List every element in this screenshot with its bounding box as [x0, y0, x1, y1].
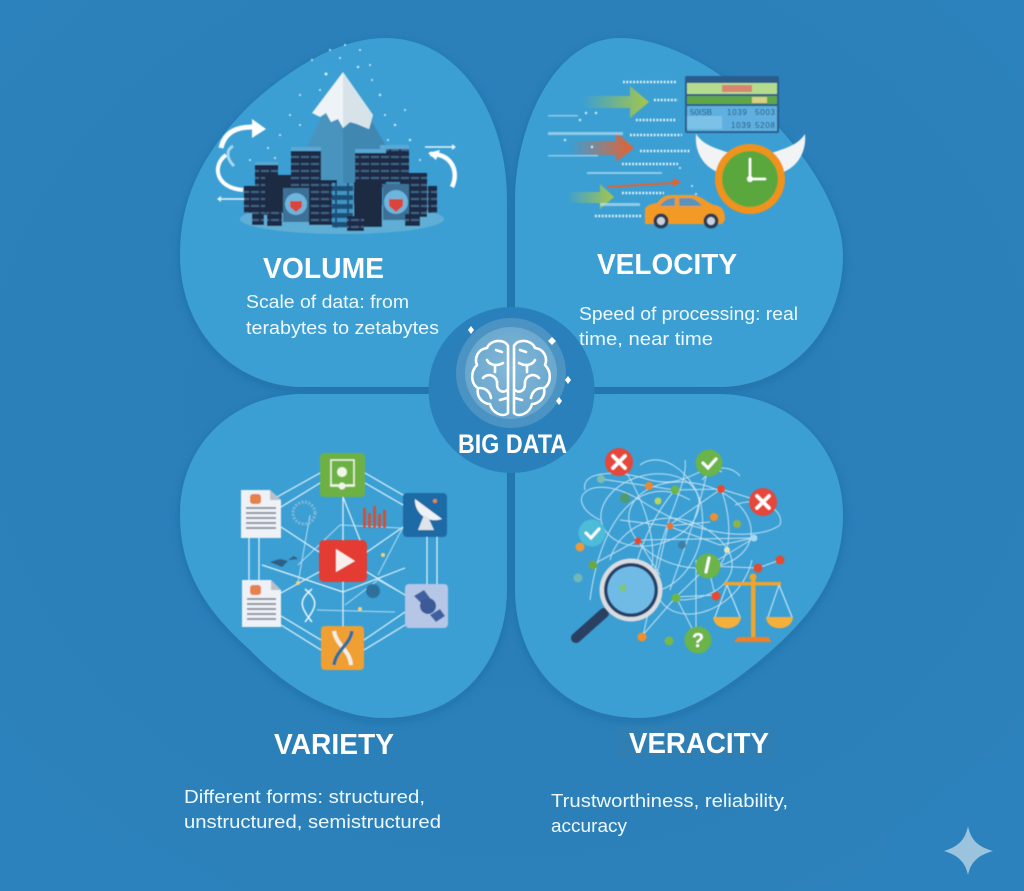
text: veracity description: Trustworthiness, reliability, [551, 790, 788, 811]
heading: variety: VARIETY [274, 729, 394, 761]
scale [713, 574, 793, 642]
icon: document bottom [242, 580, 281, 627]
badge: exclamation [696, 554, 720, 578]
center hub: big data [428, 307, 594, 473]
badge: red x right [749, 488, 777, 516]
heading: big data: BIG DATA [458, 429, 567, 459]
icon: truth network [574, 448, 793, 654]
icon: speed arrows, dashboard, clock and car [548, 76, 805, 228]
text: veracity description [551, 790, 788, 836]
badge: question: ? [692, 630, 704, 652]
panel: veracity [515, 394, 843, 836]
heading: volume: VOLUME [263, 253, 384, 285]
panel: velocity [515, 38, 843, 387]
tangled lines [581, 460, 781, 640]
text: velocity description: Speed of processing: real [579, 303, 798, 324]
heading: velocity: VELOCITY [597, 249, 737, 281]
icon: document top [241, 490, 281, 538]
dashboard: 1039 [731, 121, 752, 130]
badge: question [684, 626, 712, 654]
icon: sparkle watermark [944, 826, 993, 875]
text: variety description [184, 786, 441, 832]
arrows [221, 127, 252, 148]
badge: red x [605, 448, 633, 476]
text: volume description [246, 291, 439, 338]
icon: video play [319, 540, 367, 582]
badge: teal check [578, 520, 606, 546]
panel: variety [180, 394, 507, 832]
text: veracity description: accuracy [551, 815, 628, 836]
text: variety description: unstructured, semistructured [184, 811, 441, 832]
speed streaks [548, 115, 662, 206]
sparkles [468, 326, 571, 405]
text: volume description: terabytes to zetabytes [246, 317, 439, 338]
icon: brain [472, 341, 550, 415]
icon: dna [321, 626, 364, 670]
dashboard [685, 76, 779, 133]
car [645, 195, 725, 228]
icon: green certificate [320, 453, 365, 497]
text: volume description: Scale of data: from [246, 291, 409, 312]
icon: mountain and servers [217, 44, 456, 234]
text: velocity description [579, 303, 798, 349]
badge: green check [696, 450, 722, 476]
garbled data text [595, 82, 690, 216]
clock with wings [696, 134, 805, 214]
dashboard: 50ISB [690, 108, 712, 117]
dashboard: 1039 [727, 108, 748, 117]
icon: data type network [241, 453, 448, 670]
magnifier [576, 558, 662, 638]
heading: veracity: VERACITY [629, 728, 769, 760]
dashboard: 5003 [755, 108, 776, 117]
dashboard: 5208 [755, 121, 776, 130]
text: variety description: Different forms: structured, [184, 786, 425, 807]
panel: volume [180, 38, 507, 387]
network lines [249, 473, 437, 650]
icon: satellite dish [403, 493, 447, 537]
icon: satellite [405, 584, 448, 628]
text: velocity description: time, near time [579, 328, 713, 349]
